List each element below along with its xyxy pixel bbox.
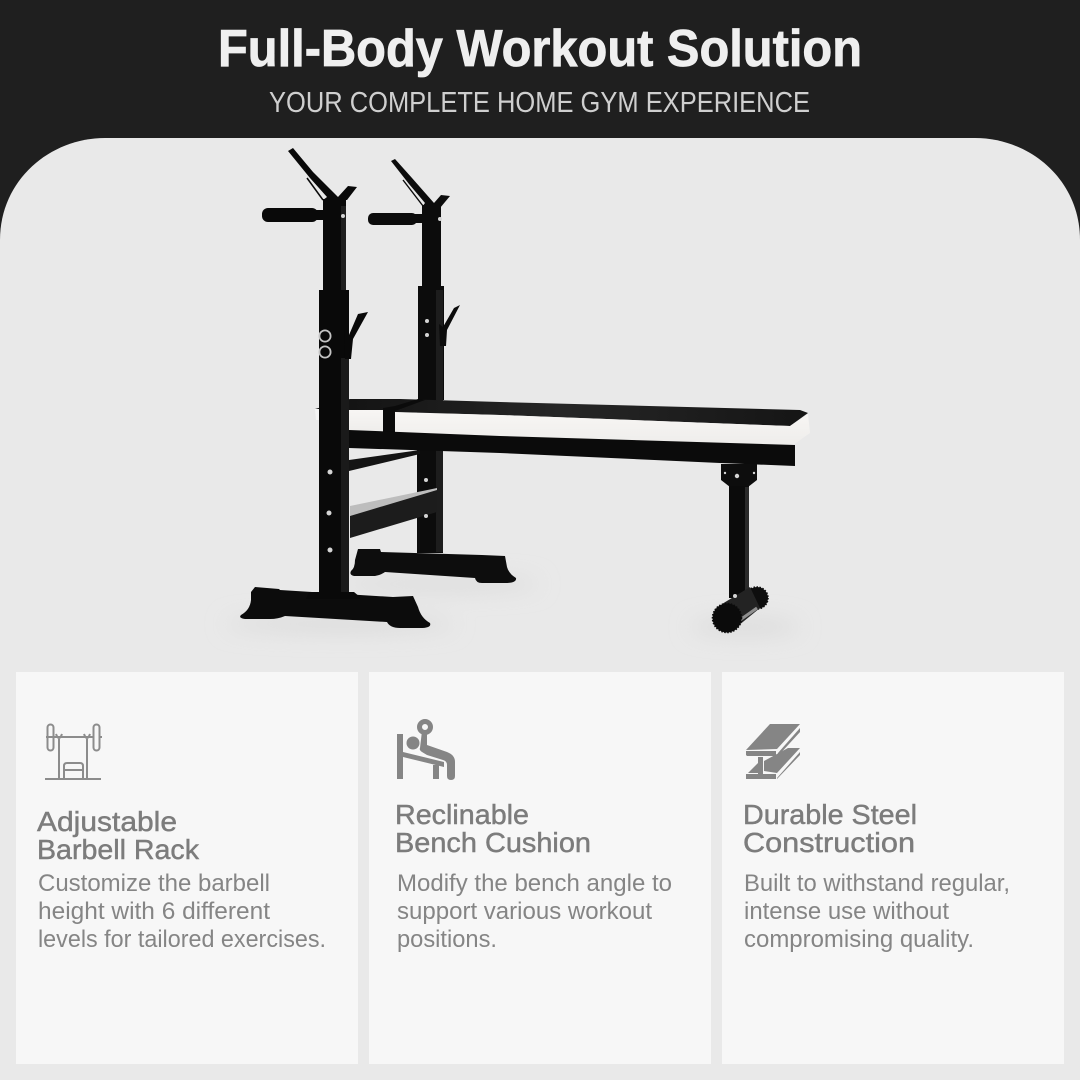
rear leg [721,464,757,487]
rear wheels [746,587,768,609]
panel: adjustable barbell rack [16,672,358,1064]
product image: weight bench [225,148,810,635]
body text: Customize the barbell [38,870,270,897]
body text [38,870,326,953]
card background [16,672,358,1064]
heading: Reclinable [395,799,529,830]
subtitle: YOUR COMPLETE HOME GYM EXPERIENCE [269,87,810,119]
heading [743,799,917,858]
body text [397,870,672,953]
front foot [240,587,430,628]
body text: height with 6 different [38,898,270,925]
seat frame beam [349,430,795,466]
body text: Modify the bench angle to [397,870,672,897]
heading: Barbell Rack [37,834,200,865]
body text: support various workout [397,898,652,925]
body text: compromising quality. [744,926,974,953]
heading: Bench Cushion [395,827,591,858]
heading: Durable Steel [743,799,917,830]
cross bars [349,450,420,471]
icon: steel I-beam [746,724,800,779]
panel: reclinable bench cushion [369,672,711,1064]
card background [369,672,711,1064]
heading [37,806,200,865]
back foot [350,549,516,583]
icon: person bench pressing [397,722,455,780]
back post [368,159,460,553]
body text: intense use without [744,898,949,925]
heading: Construction [743,827,915,858]
floor shadows [225,577,800,635]
panel: durable steel construction [722,672,1064,1064]
body text: levels for tailored exercises. [38,926,326,953]
front post [262,148,368,599]
title: Full-Body Workout Solution [218,20,862,78]
card background [722,672,1064,1064]
body text: positions. [397,926,497,953]
body text [744,870,1010,953]
icon: barbell rack [45,724,102,779]
heading [395,799,591,858]
body text: Built to withstand regular, [744,870,1010,897]
heading: Adjustable [37,806,177,837]
rings and bolts [319,330,331,358]
header band [0,0,1080,260]
seat cushion [315,399,808,426]
